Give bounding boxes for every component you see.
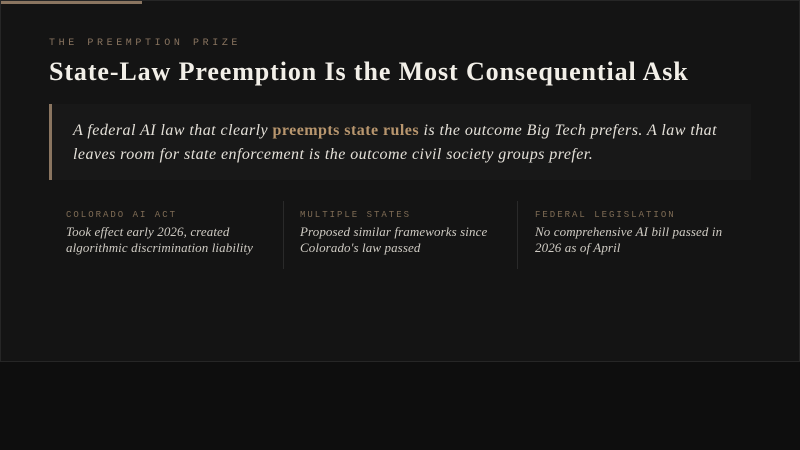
- stat: Colorado: algorithmic discrimination liability: [66, 240, 253, 255]
- stat: multiple states: Colorado's law passed: [300, 240, 420, 255]
- stat: multiple states: [283, 201, 518, 269]
- stat: Colorado: [49, 201, 284, 269]
- kicker: THE PREEMPTION PRIZE: [49, 38, 241, 49]
- stat: Colorado: COLORADO AI ACT: [66, 210, 177, 220]
- stat: federal legislation: [534, 210, 722, 255]
- callout quote: leaves room for state enforcement is the outcome civil society groups prefer.: [73, 146, 593, 163]
- stat: federal legislation: FEDERAL LEGISLATION: [535, 210, 676, 220]
- stat: federal legislation: 2026 as of April: [535, 240, 621, 255]
- stat: multiple states: MULTIPLE STATES: [300, 210, 411, 220]
- callout quote: [49, 104, 751, 180]
- callout quote: A federal AI law that clearly preempts state rules is the outcome Big Tech prefers. A law that: [73, 122, 717, 139]
- stat: multiple states: Proposed similar frameworks since: [300, 224, 487, 239]
- stat: Colorado: Took effect early 2026, created: [66, 224, 230, 239]
- title: State-Law Preemption Is the Most Consequential Ask: [49, 57, 689, 86]
- stat: federal legislation: No comprehensive AI bill passed in: [535, 224, 722, 239]
- accent bar: [1, 1, 142, 4]
